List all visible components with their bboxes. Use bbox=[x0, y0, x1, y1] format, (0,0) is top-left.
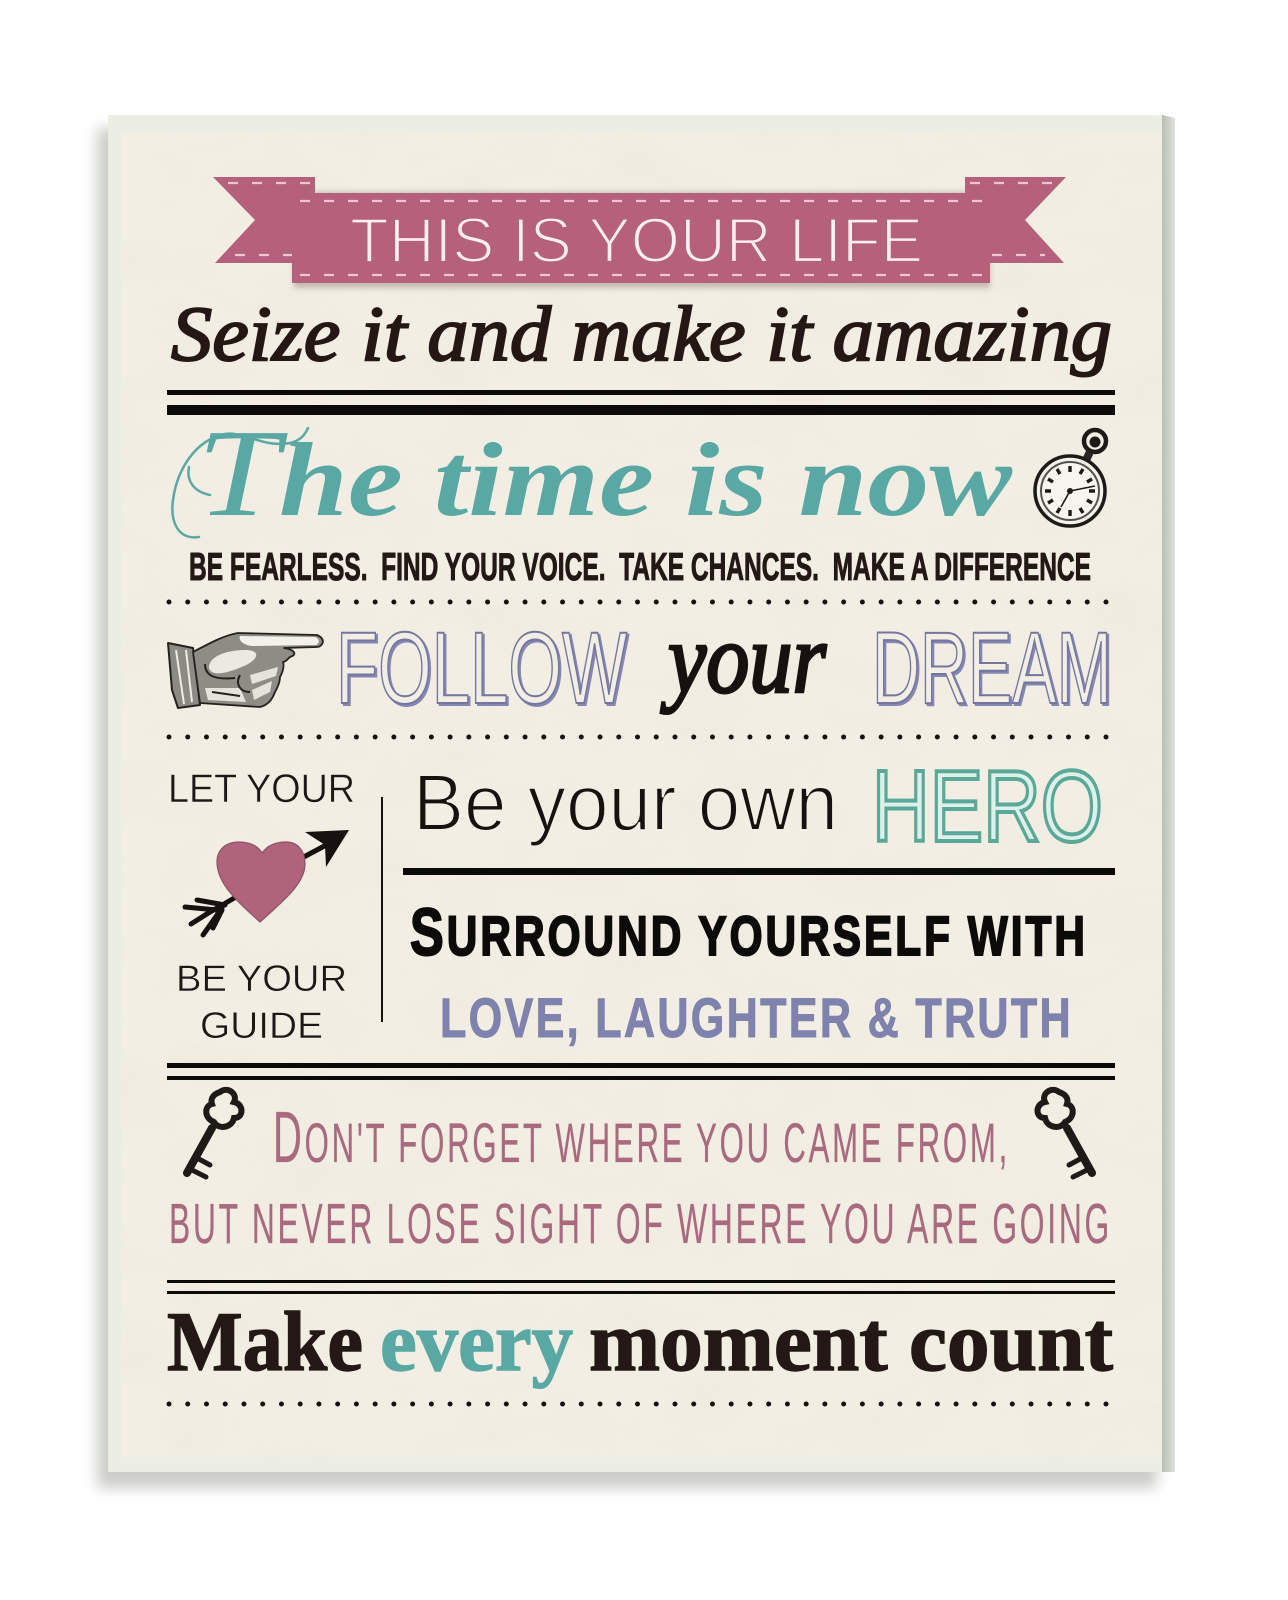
heart bbox=[217, 842, 305, 922]
arrow shaft bbox=[300, 843, 330, 859]
dotted rule bbox=[169, 1402, 1108, 1406]
vertical divider bbox=[381, 797, 383, 1022]
text: The time is now bbox=[197, 405, 1013, 543]
thumb highlight bbox=[209, 650, 256, 673]
double rule bbox=[167, 1063, 1115, 1080]
dotted rule bbox=[169, 600, 1108, 604]
dotted rule bbox=[169, 734, 1108, 740]
text: love laughter and truth: LOVE, LAUGHTER & TRUTH bbox=[440, 986, 1073, 1049]
text: guide: GUIDE bbox=[200, 1005, 323, 1046]
arrow fletching bbox=[185, 897, 236, 935]
double rule bbox=[167, 390, 1115, 415]
icon: right key bbox=[1038, 1090, 1092, 1177]
shading bbox=[205, 664, 250, 696]
icon: pointing hand bbox=[168, 633, 323, 708]
index finger highlight bbox=[240, 636, 319, 646]
double rule bbox=[167, 1280, 1115, 1294]
closing line: make every moment count bbox=[167, 1295, 1113, 1389]
banner stitching bbox=[228, 183, 1052, 275]
text: be your own: Be your own bbox=[413, 758, 838, 847]
icon: pocket watch bbox=[1035, 430, 1106, 526]
word: every: every bbox=[380, 1295, 573, 1389]
heading: The time is now bbox=[172, 405, 1013, 543]
word: make: Make bbox=[167, 1295, 363, 1389]
text: DREAM: DREAM bbox=[872, 611, 1112, 725]
banner title text: THIS IS YOUR LIFE bbox=[350, 206, 923, 276]
palm and lower fingers bbox=[193, 633, 323, 707]
text: be your: BE YOUR bbox=[176, 958, 347, 999]
icon: heart pierced by arrow bbox=[185, 830, 349, 935]
heading: Seize it and make it amazing: Seize it and make it amazing bbox=[171, 290, 1112, 377]
knuckle highlights bbox=[205, 667, 278, 702]
icon: left key bbox=[187, 1090, 242, 1177]
banner centre bbox=[292, 193, 990, 283]
banner: This is your life bbox=[213, 177, 1066, 288]
banner left tail bbox=[213, 177, 315, 263]
text: surround yourself with: SURROUND YOURSELF WITH bbox=[410, 895, 1088, 970]
text: FOLLOW: FOLLOW bbox=[336, 611, 627, 725]
text: your: your bbox=[660, 603, 827, 714]
cuff bbox=[168, 643, 200, 708]
swash of the letter T bbox=[172, 428, 308, 537]
text: let your: LET YOUR bbox=[168, 767, 355, 811]
board: wall plaque with drop shadow bbox=[97, 115, 1175, 1488]
banner right tail bbox=[965, 177, 1066, 263]
text: HERO: HERO bbox=[872, 751, 1103, 863]
words: moment count: moment count bbox=[589, 1295, 1113, 1389]
rule bbox=[403, 868, 1115, 875]
arrow head bbox=[305, 830, 349, 867]
